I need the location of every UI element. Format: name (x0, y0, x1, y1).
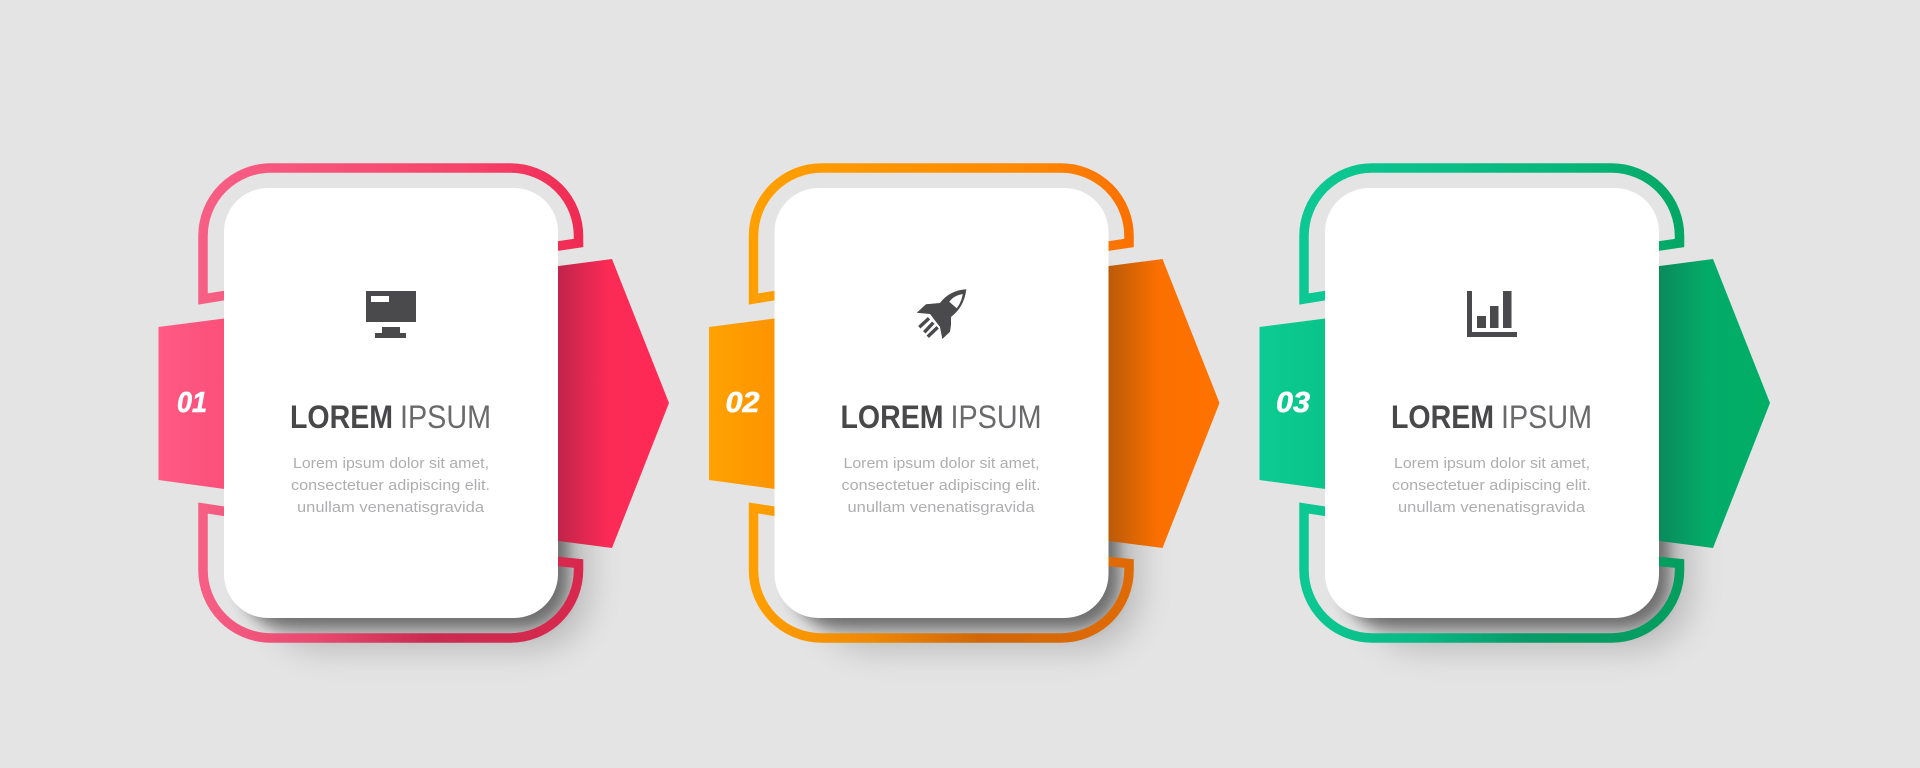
number: 02 (726, 387, 760, 419)
panel: step 1 (158, 168, 669, 652)
body text (291, 455, 490, 516)
heading (290, 399, 491, 435)
heading: IPSUM (950, 399, 1042, 435)
outer shadow (262, 480, 592, 652)
icon: rocket (917, 289, 966, 339)
body text: Lorem ipsum dolor sit amet, (293, 455, 489, 472)
card (774, 188, 1108, 618)
outline bottom (1304, 508, 1680, 638)
number tab (1260, 318, 1329, 490)
card shadow (1341, 262, 1669, 628)
number tab (709, 318, 778, 490)
body text: unullam venenatisgravida (848, 499, 1035, 516)
body text: unullam venenatisgravida (297, 499, 485, 516)
icon: monitor (366, 291, 416, 338)
card shadow (790, 262, 1118, 628)
body text (842, 455, 1040, 516)
outline top (1304, 168, 1680, 299)
body text: Lorem ipsum dolor sit amet, (844, 455, 1040, 472)
panel: step 3 (1260, 168, 1770, 652)
outer shadow (812, 480, 1142, 652)
number: 01 (177, 387, 207, 419)
outline top (203, 168, 578, 299)
body text: unullam venenatisgravida (1398, 499, 1586, 516)
number: 03 (1276, 387, 1310, 419)
heading (840, 399, 1042, 435)
heading (1391, 399, 1592, 435)
heading: LOREM (840, 399, 944, 435)
panel: step 2 (709, 168, 1220, 652)
card (224, 188, 558, 618)
outline bottom (754, 508, 1129, 638)
body text (1392, 455, 1591, 516)
body text: consectetuer adipiscing elit. (1392, 477, 1591, 494)
outline bottom (203, 508, 578, 638)
body text: consectetuer adipiscing elit. (842, 477, 1040, 494)
icon: bar chart (1467, 291, 1517, 337)
heading: LOREM (1391, 399, 1494, 435)
card (1325, 188, 1659, 618)
heading: IPSUM (400, 399, 491, 435)
arrow (1656, 259, 1770, 548)
outline top (754, 168, 1129, 299)
number tab (158, 318, 228, 490)
heading: IPSUM (1501, 399, 1592, 435)
body text: consectetuer adipiscing elit. (291, 477, 490, 494)
body text: Lorem ipsum dolor sit amet, (1394, 455, 1590, 472)
arrow (1106, 259, 1220, 548)
heading: LOREM (290, 399, 393, 435)
outer shadow (1363, 480, 1693, 652)
arrow (555, 259, 669, 548)
card shadow (240, 262, 568, 628)
